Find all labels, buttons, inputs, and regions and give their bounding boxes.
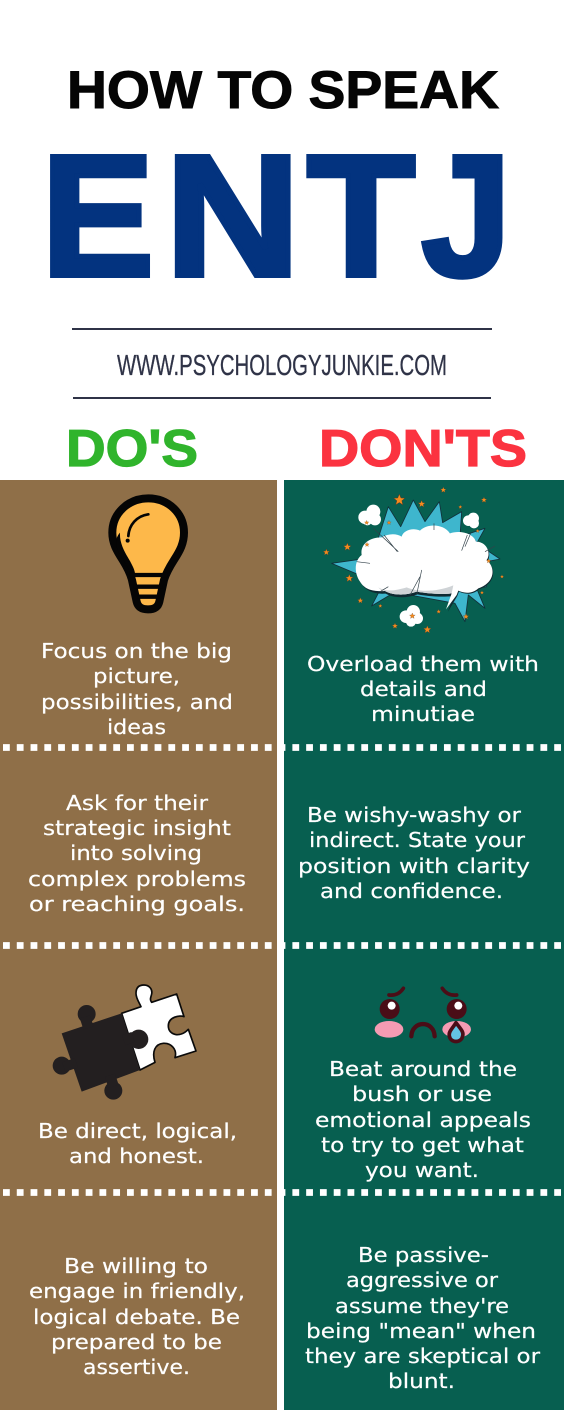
panel: do's column [0, 480, 277, 1410]
text: ask for strategic insight: into solving [70, 841, 202, 865]
text: overload them with details [307, 652, 539, 726]
text: be willing to debate: assertive. [83, 1355, 190, 1379]
heading: do's: DO'S [66, 420, 198, 478]
text: be passive-aggressive: being "mean" when [306, 1319, 536, 1343]
speed lines [357, 523, 495, 595]
heading: don'ts: DON'TS [319, 420, 527, 478]
text: be passive-aggressive: they are skeptical or [305, 1344, 541, 1368]
heading: ENTJ: E [41, 118, 154, 312]
text: be wishy-washy: position with clarity [298, 854, 530, 878]
text: be willing to debate: engage in friendly, [29, 1279, 245, 1303]
text: be wishy-washy [298, 803, 530, 903]
text: beat around the bush: bush or use [352, 1082, 492, 1106]
icon: sad face [375, 988, 471, 1041]
text: focus on the big picture: Focus on the big [41, 639, 232, 663]
text: beat around the bush [315, 1057, 531, 1182]
text: be passive-aggressive: aggressive or [346, 1268, 499, 1292]
text: ask for strategic insight: Ask for their [66, 791, 209, 815]
puffs [358, 505, 479, 627]
text: ask for strategic insight: strategic insight [43, 816, 231, 840]
text: beat around the bush: emotional appeals [315, 1108, 531, 1132]
text: be passive-aggressive: Be passive- [358, 1243, 489, 1267]
icon: light bulb [112, 498, 184, 609]
stars [323, 487, 504, 633]
heading: ENTJ [41, 118, 511, 312]
text: focus on the big picture: ideas [107, 715, 166, 739]
text: overload them with details: minutiae [371, 702, 475, 726]
text: be willing to debate: Be willing to [64, 1254, 208, 1278]
cloud [356, 525, 493, 609]
text: be willing to debate: prepared to be [51, 1330, 222, 1354]
text: be wishy-washy: and confidence. [320, 879, 503, 903]
text: be direct: Be direct, logical, [38, 1119, 237, 1143]
text: ask for strategic insight: complex problems [28, 867, 246, 891]
heading: ENTJ: N [165, 118, 300, 312]
text: be willing to debate: logical debate. Be [33, 1305, 240, 1329]
text: overload them with details: details and [360, 677, 487, 701]
text: overload them with details: Overload them with [307, 652, 539, 676]
text: be wishy-washy: indirect. State your [309, 828, 526, 852]
heading: ENTJ: J [421, 118, 511, 312]
icon: puzzle pieces [53, 985, 196, 1100]
cloud shadow [356, 526, 493, 612]
text: be wishy-washy: Be wishy-washy or [307, 803, 522, 827]
text: be direct: and honest. [69, 1144, 204, 1168]
text: be passive-aggressive [305, 1243, 541, 1393]
text: be passive-aggressive: assume they're [335, 1294, 509, 1318]
heading: ENTJ: T [307, 118, 415, 312]
title: how to speak: HOW TO SPEAK [67, 61, 499, 120]
text: beat around the bush: to try to get what [321, 1133, 524, 1157]
text: be willing to debate [29, 1254, 245, 1379]
text: beat around the bush: you want. [365, 1158, 479, 1182]
text: focus on the big picture: picture, [93, 664, 180, 688]
text: be direct [38, 1119, 237, 1168]
text: focus on the big picture: possibilities, and [41, 690, 233, 714]
text: beat around the bush: Beat around the [329, 1057, 517, 1081]
panel: don'ts column [284, 480, 564, 1410]
icon: comic explosion speech bubble [323, 487, 504, 633]
text: focus on the big picture [41, 639, 233, 739]
text: ask for strategic insight: or reaching goals. [29, 892, 245, 916]
dotted dividers [0, 748, 564, 1192]
text: ask for strategic insight [28, 791, 246, 916]
text: be passive-aggressive: blunt. [388, 1369, 455, 1393]
burst [332, 500, 500, 622]
